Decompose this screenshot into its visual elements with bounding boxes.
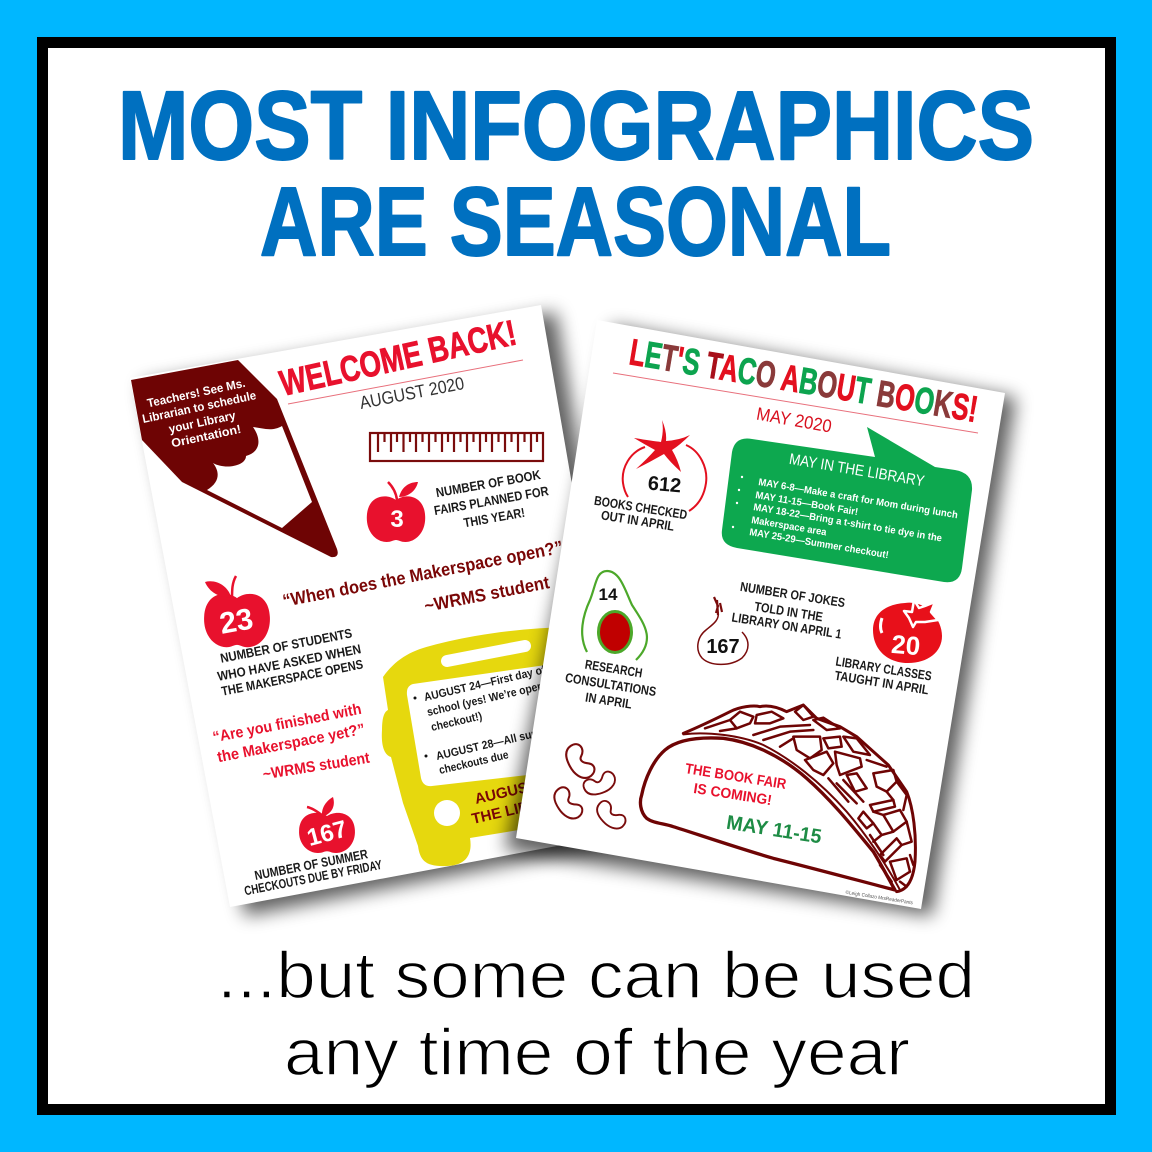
icon: yellow school bus: AUGUST 28—All summer bbox=[435, 723, 561, 763]
text: number of jokes: NUMBER OF JOKES bbox=[739, 579, 846, 610]
callout: May in the Library: MAY 25-29—Summer checkout! bbox=[749, 527, 889, 561]
text: book fairs planned: THIS YEAR! bbox=[462, 505, 526, 530]
text: books checked out: OUT IN APRIL bbox=[600, 507, 675, 534]
text: number of jokes: LIBRARY ON APRIL 1 bbox=[731, 609, 843, 642]
subheading: May 2020: MAY 2020 bbox=[755, 404, 833, 437]
callout: May in the Library: Makerspace area bbox=[751, 515, 828, 539]
text: the book fair is coming: THE BOOK FAIR bbox=[684, 761, 788, 793]
icon: pencil: Librarian to schedule bbox=[141, 388, 258, 426]
text: library classes: TAUGHT IN APRIL bbox=[834, 668, 930, 697]
text: summer checkouts: NUMBER OF SUMMER bbox=[253, 846, 370, 883]
callout: May in the Library: MAY 18-22—Bring a t-shirt to tie dye in the bbox=[753, 502, 943, 545]
text: research consultations bbox=[564, 657, 658, 712]
text: book fairs planned: FAIRS PLANNED FOR bbox=[433, 483, 550, 518]
text: students asked: NUMBER OF STUDENTS bbox=[219, 625, 354, 666]
panel: Welcome Back infographic sheet bbox=[130, 305, 645, 916]
icon: beans bbox=[549, 741, 629, 833]
callout: May in the Library: MAY IN THE LIBRARY bbox=[788, 451, 926, 490]
icon: avocado with number 14: 14 bbox=[599, 585, 618, 604]
icon: chili outline with number 167: 167 bbox=[706, 636, 740, 658]
text: students asked bbox=[216, 625, 365, 699]
icon: apple with number 3 bbox=[367, 482, 425, 542]
icon: ruler bbox=[370, 433, 543, 461]
icon: avocado with number 14 bbox=[582, 571, 647, 660]
text: the book fair is coming bbox=[684, 761, 823, 848]
closing text bbox=[217, 938, 975, 1089]
text: library classes bbox=[834, 654, 933, 697]
quote: are you finished: “Are you finished with bbox=[211, 701, 363, 746]
icon: yellow school bus: checkout!) bbox=[430, 711, 483, 734]
icon: yellow school bus: checkouts due bbox=[438, 749, 510, 777]
quote: are you finished: the Makerspace yet?” bbox=[216, 721, 366, 766]
text: number of jokes bbox=[731, 579, 846, 642]
callout: May in the Library bbox=[722, 427, 972, 582]
text: the book fair is coming: IS COMING! bbox=[692, 781, 773, 809]
icon: pencil: Orientation! bbox=[170, 422, 242, 450]
icon: chili outline with number 167 bbox=[698, 597, 748, 664]
quote: are you finished: ~WRMS student bbox=[262, 750, 371, 783]
text: copyright: ©Leigh Collazo MrsReaderPants bbox=[845, 889, 914, 906]
quote: when does the Makerspace open: “When does the Makerspace open?” bbox=[281, 537, 565, 611]
text: book fairs planned: NUMBER OF BOOK bbox=[435, 467, 542, 500]
icon: apple with number 167 bbox=[299, 797, 355, 853]
callout: May in the Library: MAY 6-8—Make a craft for Mom during lunch bbox=[758, 477, 959, 521]
text: the book fair is coming: MAY 11-15 bbox=[725, 812, 823, 848]
closing text: any time of the year bbox=[284, 1015, 910, 1089]
text: books checked out: BOOKS CHECKED bbox=[593, 493, 688, 522]
icon: apple with number 3: 3 bbox=[390, 506, 404, 533]
subheading: August 2020: AUGUST 2020 bbox=[358, 373, 466, 413]
icon: red tomato with number 20: 20 bbox=[890, 629, 921, 661]
text: research consultations: RESEARCH bbox=[584, 657, 644, 680]
icon: tomato with number 612 bbox=[623, 420, 706, 511]
icon: pencil: your Library bbox=[167, 408, 237, 436]
icon: apple with number 23 bbox=[204, 576, 270, 647]
text: book fairs planned bbox=[433, 467, 550, 530]
text: students asked: WHO HAVE ASKED WHEN bbox=[216, 641, 362, 684]
title: ARE SEASONAL bbox=[260, 167, 891, 276]
closing text: ...but some can be used bbox=[217, 938, 975, 1012]
text: library classes: LIBRARY CLASSES bbox=[835, 654, 933, 684]
icon: yellow school bus bbox=[382, 627, 640, 866]
icon: pencil: Teachers! See Ms. bbox=[146, 376, 247, 410]
icon: yellow school bus: school (yes! We’re open for bbox=[426, 677, 562, 719]
icon: yellow school bus: AUGUST 31 bbox=[473, 772, 559, 808]
text: summer checkouts: CHECKOUTS DUE BY FRIDAY bbox=[243, 857, 384, 898]
title: MOST INFOGRAPHICS bbox=[118, 71, 1034, 180]
icon: taco bbox=[640, 705, 915, 892]
title bbox=[118, 71, 1034, 276]
icon: red tomato with number 20 bbox=[873, 600, 942, 663]
heading: Let's Taco About Books: LET'S TACO ABOUT BOOKS! bbox=[627, 331, 981, 430]
text: research consultations: IN APRIL bbox=[584, 689, 633, 712]
icon: yellow school bus: AUGUST 24—First day of bbox=[423, 664, 547, 704]
text: number of jokes: TOLD IN THE bbox=[753, 599, 824, 624]
text: research consultations: CONSULTATIONS bbox=[564, 670, 658, 699]
icon: tomato with number 612: 612 bbox=[647, 473, 682, 497]
quote: when does the Makerspace open: ~WRMS student bbox=[423, 572, 551, 616]
heading: Welcome Back: WELCOME BACK! bbox=[276, 312, 520, 404]
icon: yellow school bus: THE LIBRARY bbox=[470, 789, 572, 828]
icon: apple with number 23: 23 bbox=[217, 602, 256, 641]
text: students asked: THE MAKERSPACE OPENS bbox=[220, 656, 365, 699]
quote: are you finished bbox=[211, 701, 371, 783]
icon: apple with number 167: 167 bbox=[304, 816, 350, 852]
icon: pencil bbox=[131, 360, 338, 557]
text: books checked out bbox=[593, 493, 688, 534]
callout: May in the Library: MAY 11-15—Book Fair! bbox=[755, 490, 859, 518]
panel: Let's Taco About Books infographic sheet bbox=[505, 320, 1016, 916]
